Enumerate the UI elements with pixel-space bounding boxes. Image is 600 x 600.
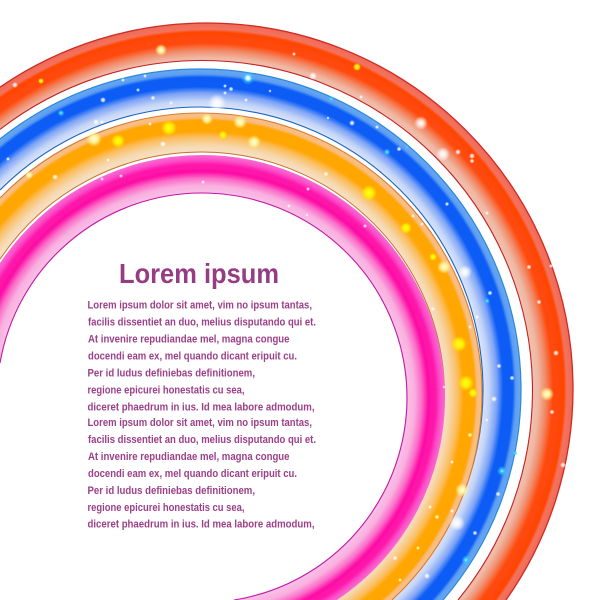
arc: magenta xyxy=(0,155,445,600)
body text: docendi eam ex, mel quando dicant eripuit cu. xyxy=(88,468,297,480)
sparkles: blue arc xyxy=(6,71,518,579)
body text: Per id ludus definiebas definitionem, xyxy=(88,485,255,497)
body text: facilis dissentiet an duo, melius disputando qui et. xyxy=(88,434,316,446)
body text: Lorem ipsum dolor sit amet, vim no ipsum tantas, xyxy=(88,417,312,429)
body text: At invenire repudiandae mel, magna congue xyxy=(88,334,290,346)
sparkles: magenta arc xyxy=(100,174,446,389)
body text: diceret phaedrum in ius. Id mea labore admodum, xyxy=(88,402,314,414)
arc: orange xyxy=(0,113,482,600)
body text xyxy=(88,300,316,530)
sparkles: orange arc xyxy=(25,113,478,582)
title: Lorem ipsum xyxy=(119,258,279,289)
body text: At invenire repudiandae mel, magna congue xyxy=(88,451,290,463)
body text: docendi eam ex, mel quando dicant eripuit cu. xyxy=(88,350,297,362)
body text: diceret phaedrum in ius. Id mea labore admodum, xyxy=(88,518,314,530)
body text: Per id ludus definiebas definitionem, xyxy=(88,368,255,380)
body text: regione epicurei honestatis cu sea, xyxy=(88,502,244,514)
body text: facilis dissentiet an duo, melius disputando qui et. xyxy=(88,316,316,328)
body text: Lorem ipsum dolor sit amet, vim no ipsum tantas, xyxy=(88,300,312,312)
sparkles: red arc xyxy=(12,44,566,468)
arc: blue xyxy=(0,69,521,600)
body text: regione epicurei honestatis cu sea, xyxy=(88,384,244,396)
